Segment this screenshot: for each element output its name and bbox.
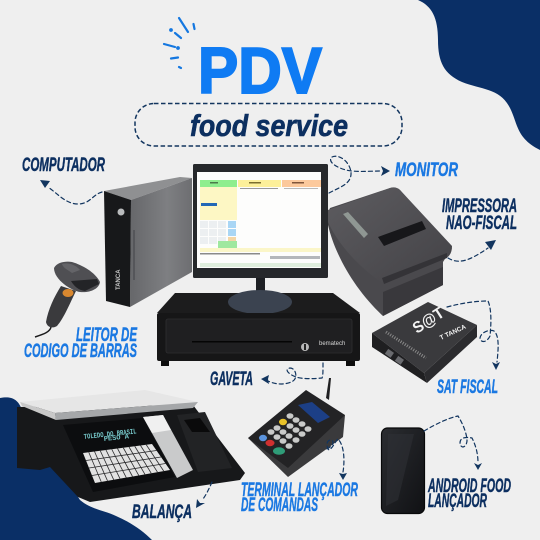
decorative corner top right: [418, 0, 540, 150]
monitor: [193, 164, 328, 294]
scale display: TOLEDO DO BRASIL: [83, 428, 137, 442]
price scale: [17, 390, 245, 502]
arrow: sat fiscal: [447, 301, 500, 370]
label: impressora não-fiscal: [442, 195, 517, 234]
arrow: impressora: [448, 240, 496, 261]
arrow: computador: [40, 180, 102, 204]
subtitle pill: food service: [190, 108, 348, 143]
thermal printer: [328, 187, 452, 316]
SAT fiscal device: T TANCA: [439, 323, 468, 342]
label: android food lançador: [427, 475, 511, 512]
cash drawer: [157, 290, 360, 366]
SAT fiscal device: [372, 302, 477, 383]
subtitle pill: [135, 104, 402, 146]
label: terminal lançador de comandas: [241, 479, 358, 516]
monitor screen: [197, 172, 321, 268]
label: leitor de código de barras: CODIGO DE BARRAS: [24, 340, 137, 362]
computer tower: [104, 177, 192, 307]
cash drawer: bematech: [319, 341, 345, 347]
SAT fiscal device: S@T: [410, 304, 448, 337]
icon: sparkle lines: [164, 18, 194, 68]
barcode scanner: [35, 262, 100, 337]
label: balança: BALANÇA: [132, 501, 192, 523]
label: monitor: MONITOR: [395, 159, 458, 181]
arrow: android: [424, 416, 482, 470]
scale display: [63, 418, 175, 492]
label: leitor de código de barras: LEITOR DE: [76, 324, 138, 346]
label: android food lançador: LANÇADOR: [428, 490, 487, 512]
label: terminal lançador de comandas: DE COMANDAS: [241, 494, 318, 516]
arrow: monitor: [329, 156, 390, 193]
title: PDV: [198, 34, 322, 107]
order terminal: [248, 378, 345, 477]
arrow: gaveta: [261, 363, 323, 384]
android phone: [382, 428, 424, 514]
arrow: balança: [196, 482, 212, 508]
decorative corner bottom left: [0, 397, 152, 540]
scale keypad: [83, 444, 170, 483]
arrow: terminal: [327, 439, 347, 480]
label: terminal lançador de comandas: TERMINAL LANÇADOR: [241, 479, 358, 501]
scale display: PESO A: [103, 433, 130, 444]
label: gaveta: GAVETA: [210, 368, 253, 390]
computer tower: TANCA: [116, 269, 122, 290]
label: leitor de código de barras: [24, 324, 138, 362]
label: computador: COMPUTADOR: [22, 154, 105, 176]
